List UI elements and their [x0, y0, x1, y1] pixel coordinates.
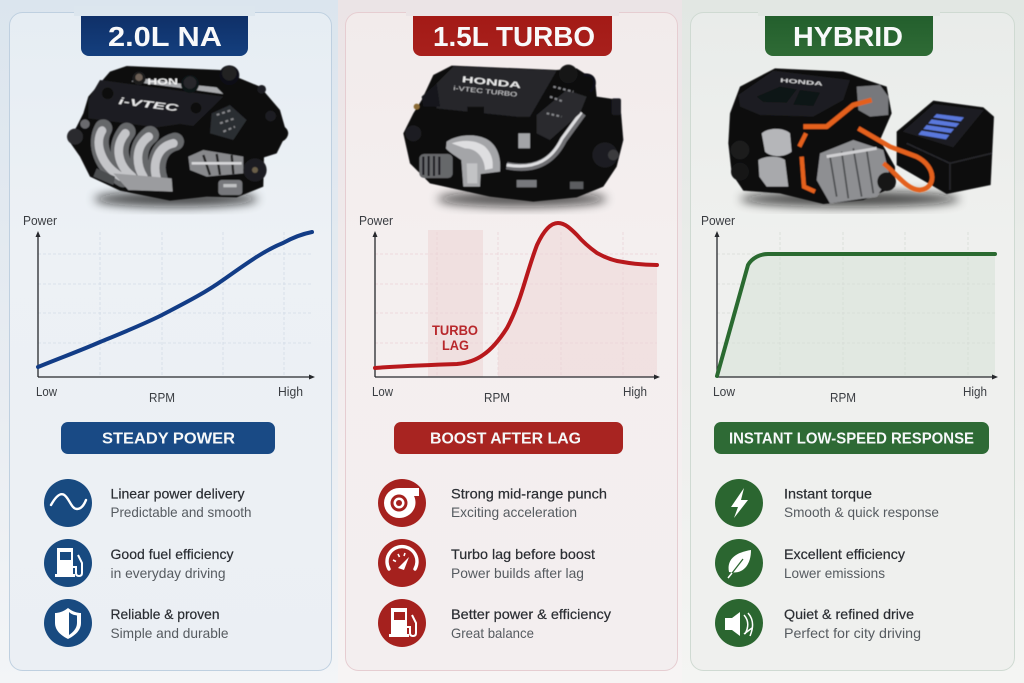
- feature: reliable: [110, 606, 228, 641]
- chart: steady power curve: [23, 214, 315, 405]
- icon: leaf: [715, 539, 763, 587]
- engine illustration: hybrid with battery: HONDA: [780, 78, 823, 88]
- label pill: instant low-speed response: [714, 422, 989, 454]
- feature: turbo lag: [451, 546, 595, 581]
- chart: steady power curve: Power: [23, 214, 57, 228]
- engine illustration: naturally aspirated: HON: [147, 78, 178, 87]
- feature: mid-range punch: Exciting acceleration: [451, 505, 577, 520]
- feature: reliable: Reliable & proven: [110, 606, 220, 622]
- title badge: 2.0L NA: [81, 16, 248, 56]
- chart: steady power curve: Low: [36, 385, 58, 399]
- label pill: boost after lag: BOOST AFTER LAG: [430, 430, 581, 448]
- feature: fuel efficiency: Good fuel efficiency: [110, 546, 234, 562]
- feature: linear power: Linear power delivery: [110, 486, 244, 502]
- feature: turbo lag: Power builds after lag: [451, 566, 584, 581]
- icon: turbocharger: [378, 479, 426, 527]
- engine illustration: turbo: HONDA: [461, 74, 523, 90]
- engine illustration: naturally aspirated: [67, 65, 287, 207]
- feature: linear power: Predictable and smooth: [110, 505, 252, 520]
- feature: fuel efficiency: [110, 546, 234, 581]
- engine illustration: naturally aspirated: i-VTEC: [118, 96, 181, 115]
- chart: boost after lag curve: TURBO: [432, 323, 478, 338]
- title badge: 1.5L TURBO: [413, 16, 612, 56]
- feature: fuel efficiency: in everyday driving: [110, 566, 226, 581]
- icon: sine wave: [44, 479, 92, 527]
- chart: steady power curve: RPM: [149, 391, 175, 405]
- label pill: steady power: STEADY POWER: [102, 430, 235, 448]
- panel: HYBRID: [690, 6, 1014, 670]
- feature: power and efficiency: Great balance: [451, 626, 534, 641]
- feature: quiet drive: Quiet & refined drive: [784, 606, 914, 622]
- feature: linear power: [110, 486, 252, 520]
- panel: 2.0L NA: [10, 6, 332, 670]
- chart: instant response curve: Power: [701, 214, 735, 228]
- chart: instant response curve: [701, 214, 998, 405]
- feature: turbo lag: Turbo lag before boost: [451, 546, 595, 562]
- chart: boost after lag curve: Low: [372, 385, 394, 399]
- feature: excellent efficiency: Lower emissions: [784, 566, 885, 581]
- chart: boost after lag curve: High: [623, 385, 647, 399]
- icon: fuel pump: [44, 539, 92, 587]
- icon: fuel pump: [378, 599, 426, 647]
- feature: excellent efficiency: [784, 546, 905, 581]
- engine illustration: hybrid with battery: [728, 68, 994, 207]
- title badge: HYBRID: HYBRID: [793, 21, 903, 52]
- engine illustration: turbo: i-VTEC TURBO: [453, 85, 518, 99]
- feature: mid-range punch: [451, 486, 607, 520]
- feature: mid-range punch: Strong mid-range punch: [451, 486, 607, 502]
- chart: steady power curve: High: [278, 385, 303, 399]
- icon: quiet speaker: [715, 599, 763, 647]
- feature: power and efficiency: Better power & efficiency: [451, 606, 611, 622]
- feature: reliable: Simple and durable: [110, 626, 228, 641]
- engine illustration: turbo: [403, 65, 623, 207]
- icon: shield: [44, 599, 92, 647]
- feature: excellent efficiency: Excellent efficiency: [784, 546, 905, 562]
- turbo lag band: [428, 230, 483, 377]
- feature: power and efficiency: [451, 606, 611, 641]
- chart: boost after lag curve: LAG: [442, 338, 469, 353]
- title badge: 1.5L TURBO: 1.5L TURBO: [433, 21, 595, 52]
- feature: instant torque: [784, 486, 939, 520]
- title badge: HYBRID: [765, 16, 933, 56]
- feature: quiet drive: [784, 606, 921, 641]
- chart: instant response curve: Low: [713, 385, 736, 399]
- icon: lightning bolt: [715, 479, 763, 527]
- chart: boost after lag curve: [359, 214, 660, 405]
- chart: boost after lag curve: RPM: [484, 391, 510, 405]
- icon: gauge: [378, 539, 426, 587]
- feature: instant torque: Smooth & quick response: [784, 505, 939, 520]
- label pill: instant low-speed response: INSTANT LOW-SPEED RESPONSE: [729, 430, 974, 448]
- label pill: boost after lag: [394, 422, 623, 454]
- feature: instant torque: Instant torque: [784, 486, 872, 502]
- label pill: steady power: [61, 422, 275, 454]
- chart: boost after lag curve: Power: [359, 214, 393, 228]
- chart: instant response curve: High: [963, 385, 987, 399]
- panel: 1.5L TURBO: [346, 6, 678, 670]
- feature: quiet drive: Perfect for city driving: [784, 626, 921, 641]
- chart: instant response curve: RPM: [830, 391, 856, 405]
- battery pack: [897, 101, 994, 194]
- title badge: 2.0L NA: 2.0L NA: [108, 21, 222, 52]
